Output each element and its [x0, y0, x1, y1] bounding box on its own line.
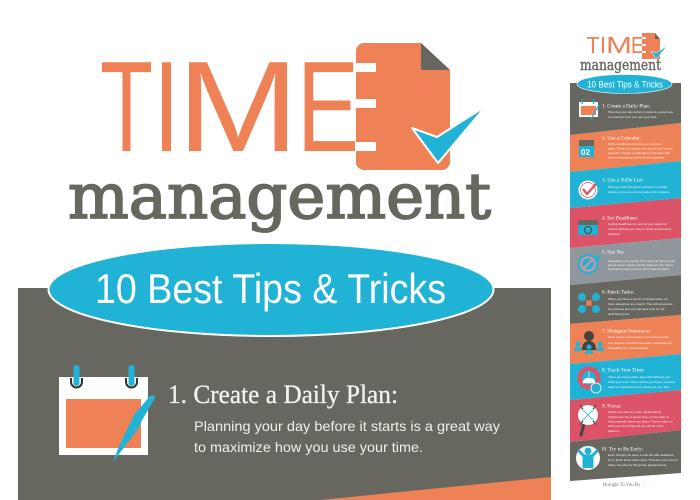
panel: full infographic thumbnail: [570, 32, 681, 488]
thumbnail tip 6: switching focus.: [608, 312, 630, 316]
thumbnail tip 5: be afraid to say no if you don't have the time.: [608, 267, 670, 271]
thumbnail tip 6: them altogether as a batch. This will streamline: [608, 302, 673, 306]
thumbnail tip 4: [578, 216, 672, 236]
thumbnail tip 5: [578, 250, 675, 274]
thumbnail tip 2: step to managing your time and activities.: [608, 156, 665, 160]
thumbnail tip 9: might seem like it saves time, but the lack of: [608, 415, 669, 419]
thumbnail tip 7: 7. Delegate/Outsource:: [602, 328, 651, 334]
panel: orange section start: [320, 477, 551, 500]
logo word TIME: M: [177, 35, 299, 179]
thumbnail tip 8: 8. Track Your Time:: [602, 368, 645, 374]
thumbnail credit: Brought To You By . . . .: [603, 483, 650, 488]
thumbnail tip 5: Sometimes you simply don't have the time to say: [608, 259, 675, 263]
heading: tip 1: 1. Create a Daily Plan:: [168, 380, 398, 409]
thumbnail tip 6: When you have a bunch of similar tasks, do: [608, 297, 668, 301]
thumbnail tip 10: [576, 446, 678, 470]
thumbnail tip 8: [578, 367, 675, 393]
thumbnail tip 9: Tackle one task at a time. Multi-tasking: [608, 410, 661, 414]
thumbnail panel 10: [570, 430, 681, 481]
thumbnail logo: management: [580, 56, 661, 74]
thumbnail tip 9: efficient.: [608, 429, 620, 433]
thumbnail tip 2: 02: [581, 148, 590, 157]
thumbnail tip 6: 6. Batch Tasks:: [602, 290, 635, 296]
thumbnail tip 1: 1. Create a Daily Plan:: [602, 104, 651, 110]
banner: large oval heading: 10 Best Tips & Tricks: [95, 265, 446, 312]
thumbnail tip 9: [578, 404, 673, 435]
thumbnail banner: [577, 74, 672, 94]
icon: check mark: [412, 106, 486, 163]
thumbnail tip 7: that anyone could do? Consider outsourcing or: [608, 341, 672, 345]
thumbnail panel 9: [570, 390, 681, 442]
thumbnail panel 7: [570, 315, 681, 364]
text: tip 1 body: [194, 418, 500, 455]
thumbnail tip 5: yes to every request people have for you. Don't: [608, 263, 673, 267]
thumbnail tip 4: prioritize.: [608, 232, 621, 236]
logo word TIME: [100, 35, 359, 179]
thumbnail tip 1: Planning your day before it starts is a great way: [608, 110, 674, 114]
thumbnail tip 9: 9. Focus:: [602, 404, 622, 410]
banner: large oval heading: [48, 243, 494, 336]
thumbnail logo: M: [606, 32, 632, 58]
thumbnail tip 10: Even though you have a todo list with deadlines,: [608, 453, 674, 457]
panel: main background: [18, 288, 551, 500]
thumbnail tip 7: delegating it to someone else.: [608, 346, 649, 350]
thumbnail tip 1: [579, 99, 674, 119]
thumbnail panel 2: [570, 123, 681, 172]
thumbnail tip 7: Have a time-consuming or monotonous task: [608, 335, 669, 339]
thumbnail panel 8: [570, 354, 681, 400]
thumbnail logo: [580, 32, 667, 74]
thumbnail tip 3: [578, 178, 671, 200]
thumbnail logo: T: [586, 32, 600, 58]
thumbnail banner: 10 Best Tips & Tricks: [587, 80, 663, 90]
thumbnail tip 2: 2. Use a Calendar:: [602, 136, 642, 142]
thumbnail tip 10: tasks, but also for things like appointments.: [608, 463, 667, 467]
thumbnail tip 7: [574, 328, 672, 354]
thumbnail logo: I: [600, 32, 606, 58]
thumbnail tip 6: the process and you will save time by not: [608, 307, 665, 311]
icon: notebook page: [356, 43, 450, 170]
icon: large calendar and pen: [59, 365, 155, 462]
thumbnail tip 3: allows you to see all your tasks with a glance.: [608, 190, 671, 194]
text: tip 1 body: to maximize how you use your time.: [194, 439, 423, 455]
thumbnail tip 10: try to finish those tasks early. This isn't only true for: [608, 458, 678, 462]
thumbnail panel 3: [570, 161, 681, 208]
logo: large management: management: [68, 160, 491, 233]
logo word TIME: T: [100, 35, 153, 179]
thumbnail tip 2: calendar. Having a calendar is a fundamental: [608, 151, 670, 155]
thumbnail tip 9: what you are doing and you will be more: [608, 424, 664, 428]
thumbnail tip 2: [579, 136, 673, 160]
thumbnail tip 6: [578, 290, 673, 316]
thumbnail panel 5: [570, 238, 681, 285]
logo word TIME: E: [297, 35, 359, 179]
thumbnail tip 3: 3. Use a ToDo List:: [602, 178, 644, 184]
thumbnail tip 8: There are many online apps that will help you: [608, 375, 671, 379]
thumbnail panel 1: [570, 83, 681, 135]
thumbnail tip 10: 10. Try to Be Early:: [601, 446, 644, 452]
thumbnail tip 4: entries will help you stay on track and properly: [608, 227, 672, 231]
thumbnail tip 8: tasks (or distractions) are taking up your time.: [608, 385, 671, 389]
logo word TIME: I: [153, 35, 180, 179]
thumbnail tip 3: Having a todo list (either physical or virtual): [608, 185, 667, 189]
thumbnail tip 4: Setting deadlines for each of your tasks list: [608, 222, 667, 226]
text: tip 1 body: Planning your day before it starts is a great way: [194, 418, 500, 434]
thumbnail panel 6: [570, 275, 681, 324]
thumbnail logo: E: [631, 32, 644, 58]
thumbnail tip 2: With a multitude of phones or computer: [608, 142, 662, 146]
thumbnail panel 4: [570, 198, 681, 248]
thumbnail tip 5: 5. Say No:: [602, 250, 625, 256]
thumbnail tip 8: track your time. These will let you figure out what: [608, 380, 675, 384]
thumbnail tip 9: focus actually slows you down. Focus solely on: [608, 420, 673, 424]
thumbnail tip 4: 4. Set Deadlines:: [602, 216, 639, 222]
thumbnail tip 1: to maximize how you use your time.: [608, 115, 657, 119]
logo: large TIME: [100, 35, 486, 179]
thumbnail tip 2: apps. There's no reason you should not have a: [608, 146, 673, 150]
